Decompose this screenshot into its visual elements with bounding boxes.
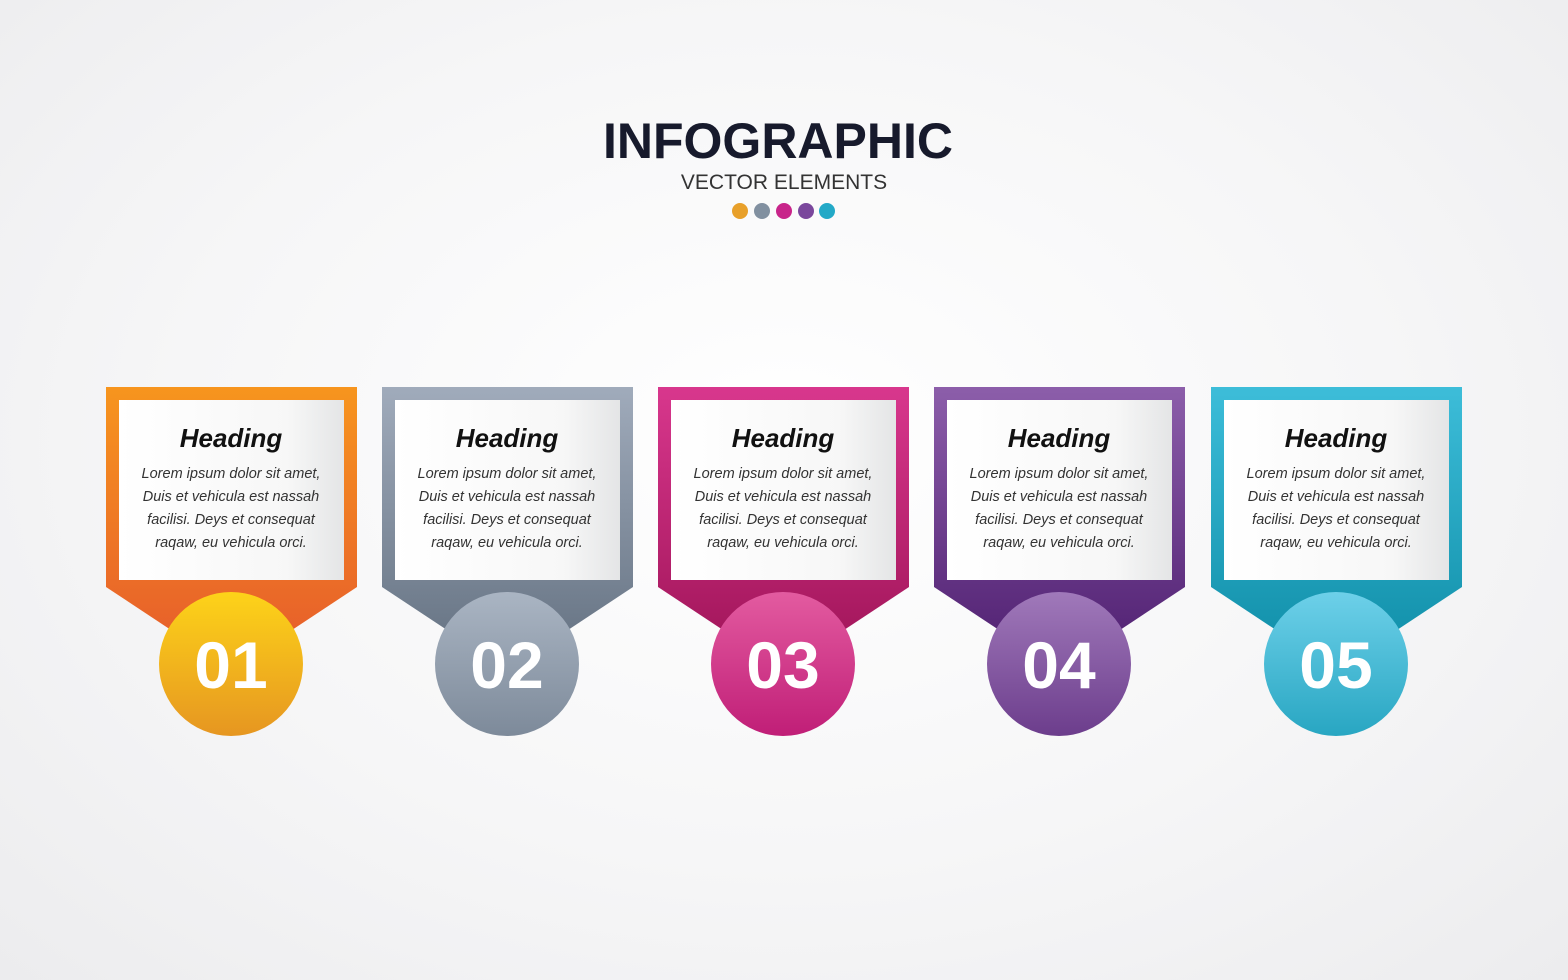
color dots [732,203,835,219]
panel: step 03: Lorem ipsum dolor sit amet, [694,466,872,482]
panel: step 02: 02 [470,628,544,702]
panel: step 04: facilisi. Deys et consequat [975,512,1144,528]
panel: step 04: Heading [1008,423,1110,453]
panel: step 01: 01 [194,628,268,702]
panel: step 04: 04 [1022,628,1096,702]
panel: step 03: 03 [746,628,820,702]
panel: step 04 [934,387,1185,736]
panel: step 02: Heading [456,423,558,453]
panel: step 05: raqaw, eu vehicula orci. [1260,535,1412,551]
panel: step 05: 05 [1299,628,1373,702]
panel: step 01: raqaw, eu vehicula orci. [155,535,307,551]
panel: step 01 [106,387,357,736]
panel: step 02 [382,387,633,736]
panel: step 04: Duis et vehicula est nassah [971,489,1147,505]
panel: step 02: raqaw, eu vehicula orci. [431,535,583,551]
panel: step 05: Duis et vehicula est nassah [1248,489,1424,505]
panel: step 01: Lorem ipsum dolor sit amet, [142,466,320,482]
title [603,113,953,194]
panel: step 03: facilisi. Deys et consequat [699,512,868,528]
panel: step 01: Duis et vehicula est nassah [143,489,319,505]
panel: step 01: Heading [180,423,282,453]
panel: step 03 [658,387,909,736]
panel: step 03: Heading [732,423,834,453]
panel: step 05: facilisi. Deys et consequat [1252,512,1421,528]
panel: step 03: Duis et vehicula est nassah [695,489,871,505]
subtitle: VECTOR ELEMENTS [681,171,887,194]
panel: step 02: Duis et vehicula est nassah [419,489,595,505]
panel: step 05 [1211,387,1462,736]
title: INFOGRAPHIC [603,113,953,169]
panel: step 05: Heading [1285,423,1387,453]
panel: step 05: Lorem ipsum dolor sit amet, [1247,466,1425,482]
panel: step 04: raqaw, eu vehicula orci. [983,535,1135,551]
panel: step 02: Lorem ipsum dolor sit amet, [418,466,596,482]
panel: step 04: Lorem ipsum dolor sit amet, [970,466,1148,482]
panel: step 02: facilisi. Deys et consequat [423,512,592,528]
panel: step 01: facilisi. Deys et consequat [147,512,316,528]
panel: step 03: raqaw, eu vehicula orci. [707,535,859,551]
